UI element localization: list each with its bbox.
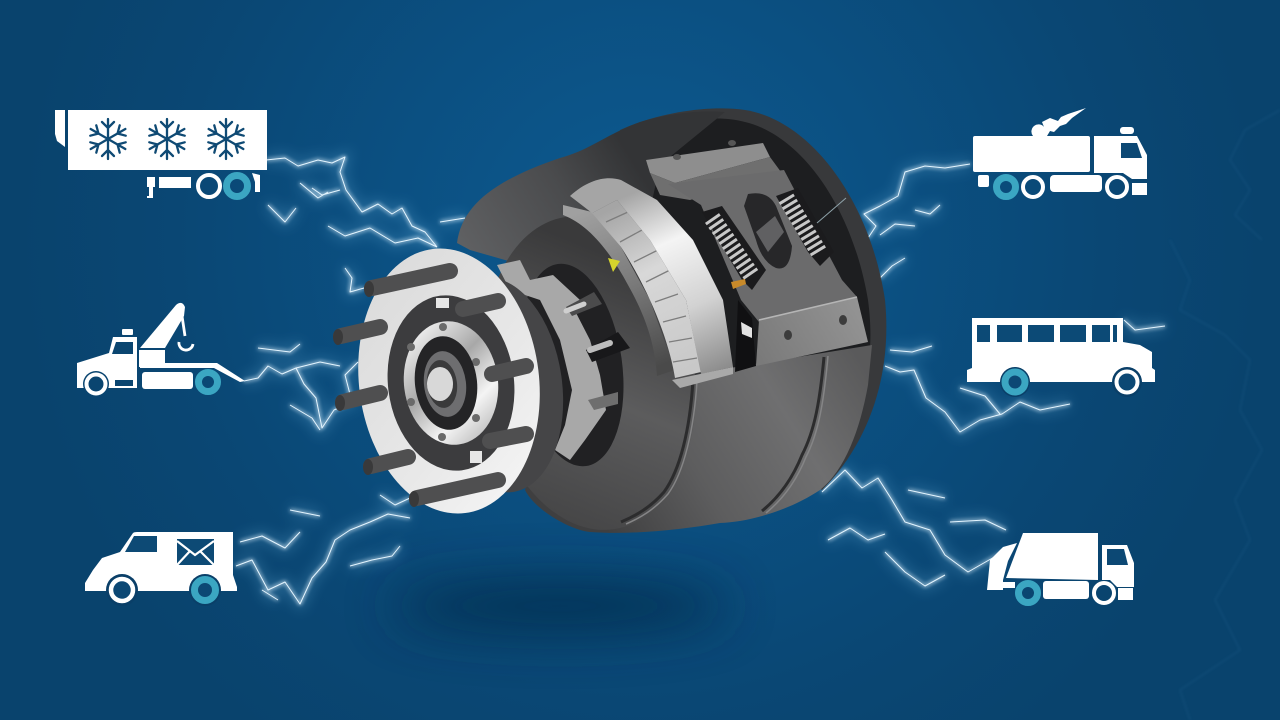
cab window: [125, 536, 157, 552]
lightning bolts: [236, 157, 1165, 604]
white wheel: [83, 371, 109, 397]
plate holes: [673, 140, 736, 160]
drum edge highlight: [626, 356, 828, 524]
chrome ring bolts: [407, 323, 480, 441]
cab front panel: [55, 110, 65, 147]
drum face disc: [463, 201, 717, 545]
lightning fog: [236, 157, 1165, 604]
bearing ring: [420, 349, 470, 419]
lower shoe plate: [756, 297, 868, 366]
bus body: [967, 318, 1155, 382]
envelope: [177, 539, 214, 565]
cab window: [1107, 549, 1128, 565]
chrome hub ring: [397, 316, 505, 450]
windows: [977, 325, 1117, 342]
dark bearing: [410, 333, 482, 433]
left spring slot: [702, 206, 766, 290]
yellow warning triangle: [608, 258, 620, 272]
side box: [1050, 175, 1102, 192]
drum body: [525, 345, 872, 533]
flatbed and ramp: [140, 363, 245, 382]
back rim: [600, 108, 886, 490]
tow truck icon: [77, 303, 245, 397]
plate top edge: [759, 297, 857, 320]
cab: [1094, 136, 1147, 179]
electric wheel-end drum assembly: [333, 108, 886, 545]
faint background lightning: [1170, 110, 1280, 720]
water cannon: [1031, 108, 1086, 136]
cab window: [112, 342, 133, 354]
inner grey band: [563, 205, 675, 376]
cavity gap: [735, 300, 756, 372]
bumper: [1132, 183, 1147, 195]
hook: [179, 316, 193, 350]
chassis slot: [115, 380, 133, 386]
body grooves: [621, 357, 824, 522]
white wheel front: [1107, 177, 1127, 197]
bumper: [1118, 588, 1133, 600]
ring notches: [436, 298, 482, 463]
compactor box: [1006, 533, 1098, 580]
shoe body: [668, 170, 857, 322]
right spring: [786, 198, 820, 254]
middle oval slot: [744, 193, 792, 269]
crane boom: [140, 303, 185, 348]
orange part: [731, 279, 746, 289]
crane base: [139, 350, 165, 367]
white wheel: [1112, 367, 1142, 397]
side box: [1043, 581, 1089, 599]
stud tips: [333, 281, 419, 507]
icon: snowflakes: [88, 119, 246, 159]
cab: [77, 337, 137, 388]
ring notches: [606, 212, 697, 362]
tank: [973, 136, 1090, 172]
left spring: [712, 218, 752, 276]
landing gear: [147, 177, 155, 198]
bus icon: [967, 318, 1155, 397]
cab window: [1121, 143, 1142, 158]
wheel studs: [341, 271, 526, 498]
garbage truck icon: [987, 533, 1134, 603]
outer hub neck: [420, 269, 576, 501]
fire truck icon: [973, 108, 1147, 197]
top shoe plate: [646, 143, 770, 183]
side box: [142, 372, 193, 389]
chrome center: [427, 367, 453, 401]
upper drum flange: [457, 111, 725, 270]
spider ring: [497, 260, 606, 460]
rear block: [978, 175, 989, 187]
teal drive wheel: [1000, 367, 1030, 397]
bright outer ring: [570, 178, 733, 374]
teal drive wheel: [198, 372, 218, 392]
side skirt: [159, 177, 191, 188]
black flange ring: [378, 288, 524, 478]
beacon: [1120, 127, 1134, 134]
notched ring: [592, 200, 701, 378]
teal drive wheel: [996, 178, 1016, 196]
white wheel flange: [343, 238, 555, 524]
white wheel: [1094, 583, 1114, 603]
trailer box: [68, 110, 267, 170]
lower plate bolts: [784, 315, 847, 340]
mail van icon: [85, 532, 237, 606]
inner rim shadow: [620, 118, 870, 395]
bearing bore: [424, 358, 460, 410]
mudflap: [252, 173, 260, 192]
right spring slot: [776, 188, 834, 266]
white wheel: [106, 574, 138, 606]
reefer trailer icon: [55, 110, 267, 198]
chrome bolts: [566, 292, 630, 410]
shoe web: [756, 216, 784, 252]
white wheel rear: [1023, 177, 1043, 197]
drum ground shadow: [390, 580, 730, 632]
teal drive wheel: [189, 574, 221, 606]
white insert: [741, 322, 752, 338]
link: [1003, 582, 1015, 588]
van body: [85, 532, 237, 591]
cab: [1102, 545, 1134, 587]
ring end: [672, 367, 733, 388]
rear loader: [987, 543, 1017, 590]
white wheel: [198, 175, 220, 197]
inner hub cavity: [508, 257, 636, 473]
spring wire: [817, 198, 846, 223]
plate side: [650, 157, 781, 200]
teal drive wheel: [1018, 584, 1038, 602]
teal drive wheel: [226, 176, 248, 196]
beacon: [122, 329, 133, 335]
